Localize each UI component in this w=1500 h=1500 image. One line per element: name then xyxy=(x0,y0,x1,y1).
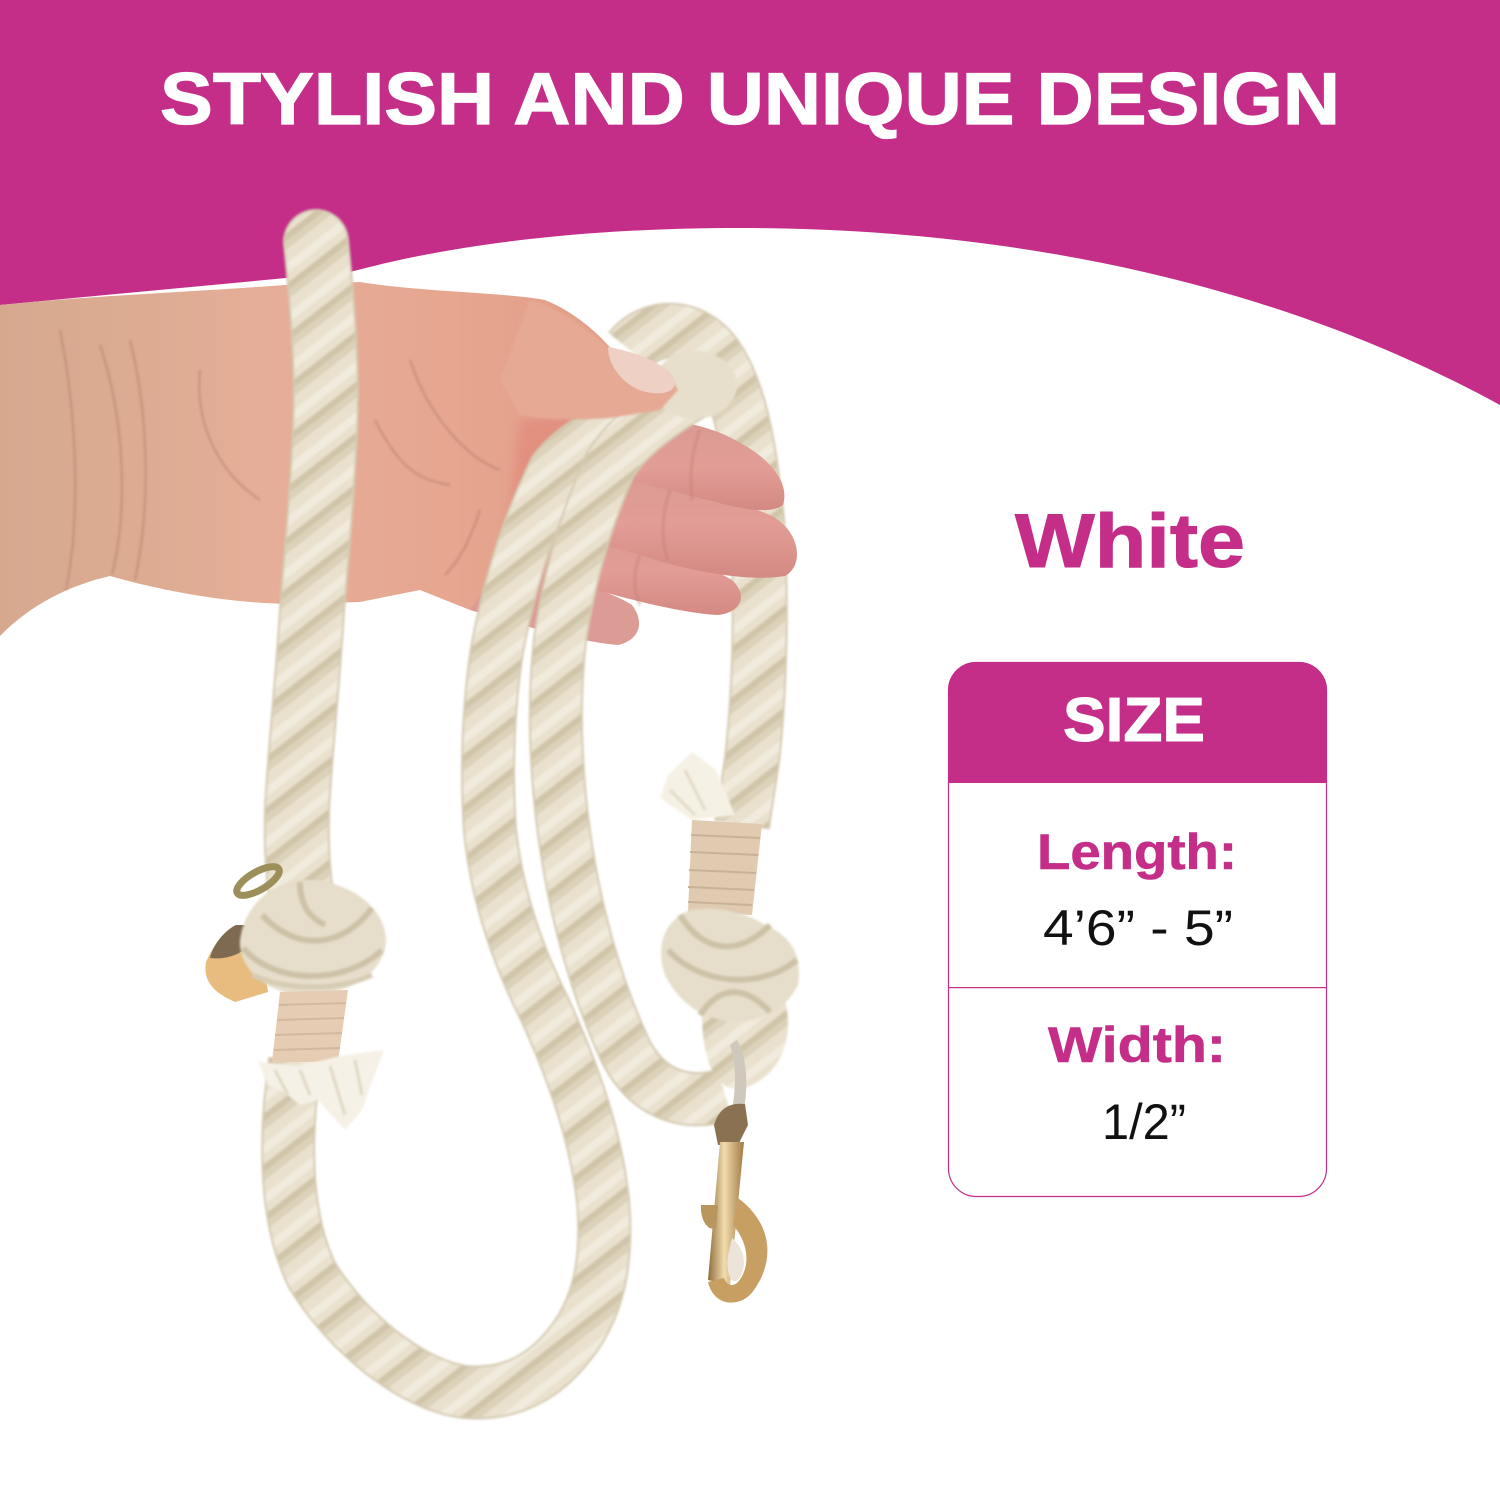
width value: 1/2” xyxy=(1102,1094,1186,1150)
ring finger xyxy=(530,520,741,615)
rope bunch gripped under thumb xyxy=(653,351,737,419)
metal snap clasp xyxy=(701,1040,767,1303)
pinky finger xyxy=(470,555,639,645)
size table xyxy=(948,662,1327,1196)
row divider xyxy=(949,987,1326,988)
left frayed tassel xyxy=(258,1050,384,1130)
thumbnail xyxy=(608,347,675,393)
finger creases xyxy=(635,430,700,605)
palm shadow between thumb and fingers xyxy=(505,415,590,540)
right twine wrap xyxy=(688,820,762,915)
palm and forearm xyxy=(0,282,640,636)
hand and forearm xyxy=(0,282,797,645)
title: STYLISH AND UNIQUE DESIGN xyxy=(160,59,1340,140)
leash rope held in hand: two hanging strands xyxy=(288,395,725,1393)
table outline xyxy=(948,662,1326,1196)
left twine wrap xyxy=(272,990,348,1062)
palm and wrist creases xyxy=(60,330,500,590)
table header label: SIZE xyxy=(1063,686,1205,755)
leash left ring and bell xyxy=(205,861,283,1002)
colour name: White xyxy=(1015,499,1245,584)
leash rope behind fingers xyxy=(630,331,760,825)
middle finger xyxy=(550,460,797,578)
length label: Length: xyxy=(1037,824,1237,880)
width label: Width: xyxy=(1048,1017,1226,1073)
thumb xyxy=(500,300,678,419)
index finger xyxy=(580,417,784,510)
leash handle loop over hand xyxy=(297,242,326,920)
left knot xyxy=(240,880,386,995)
header banner with curved edge xyxy=(0,0,1500,405)
right frayed tassel xyxy=(660,752,735,820)
right knot and rope tail xyxy=(661,909,799,1089)
table header xyxy=(948,662,1327,783)
length value: 4’6” - 5” xyxy=(1043,900,1233,956)
